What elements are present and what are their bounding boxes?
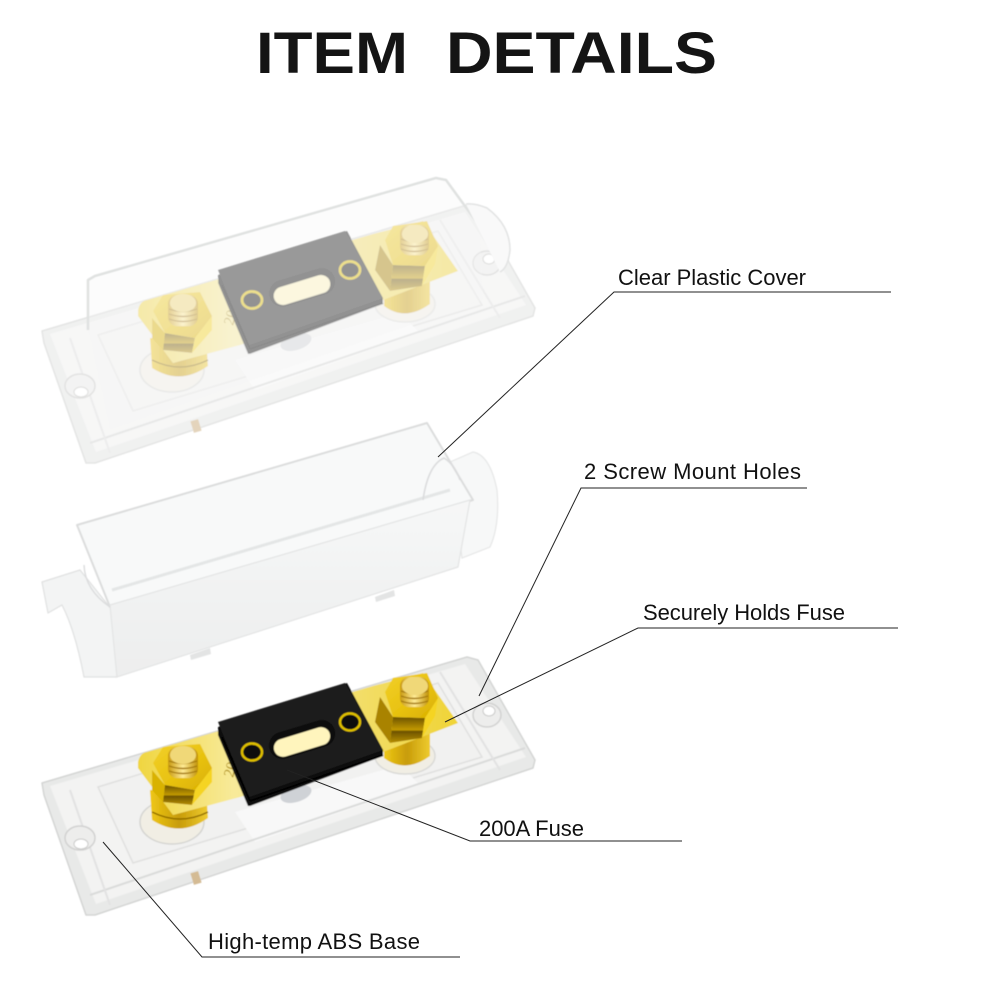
front face	[110, 500, 470, 677]
callout: Securely Holds Fuse	[445, 600, 898, 722]
assembled fuse holder with cover	[42, 178, 535, 463]
callout: 200A Fuse	[287, 770, 682, 841]
callout: Clear Plastic Cover	[438, 265, 891, 457]
callout: High-temp ABS Base: High-temp ABS Base	[208, 929, 420, 954]
callout: 2 Screw Mount Holes: 2 Screw Mount Holes	[584, 459, 801, 484]
callout: High-temp ABS Base	[103, 842, 460, 957]
title	[256, 21, 717, 86]
callout: 200A Fuse: 200A Fuse	[479, 816, 584, 841]
separate clear plastic cover	[42, 423, 498, 677]
right lug	[450, 452, 498, 558]
fuse holder seen through cover	[42, 205, 535, 463]
callout: Clear Plastic Cover: Clear Plastic Cover	[618, 265, 806, 290]
title: ITEM	[256, 21, 408, 86]
title: DETAILS	[446, 21, 717, 86]
callout: Securely Holds Fuse: Securely Holds Fuse	[643, 600, 845, 625]
bottom open fuse holder	[42, 657, 535, 915]
inner back wall	[77, 423, 473, 607]
left lug	[42, 570, 117, 677]
callout: 2 Screw Mount Holes	[479, 459, 807, 696]
clear cover on holder	[88, 178, 510, 430]
tabs	[190, 648, 211, 660]
